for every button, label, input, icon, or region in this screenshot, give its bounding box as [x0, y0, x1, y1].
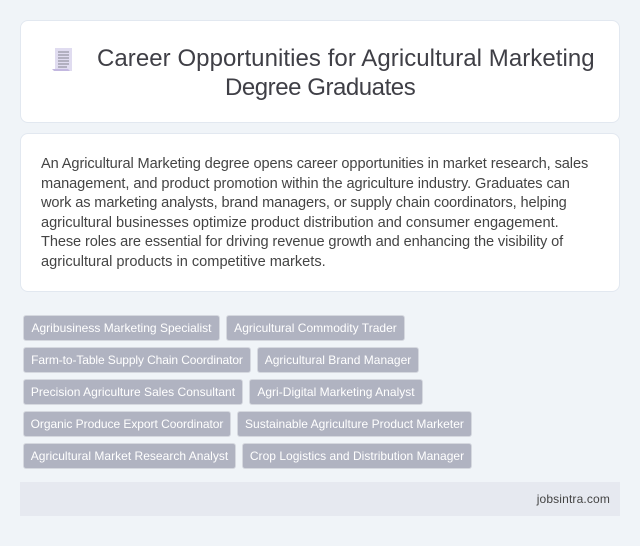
tag	[226, 315, 405, 341]
tag: Farm-to-Table Supply Chain Coordinator	[31, 353, 243, 367]
description text: agricultural businesses optimize product distribution and consumer engagement.	[41, 214, 559, 230]
tag: Agribusiness Marketing Specialist	[31, 321, 212, 335]
icon: document scroll	[52, 48, 72, 71]
description text	[41, 156, 588, 270]
tag: Sustainable Agriculture Product Marketer	[245, 417, 464, 431]
title line 2: Degree Graduates	[225, 74, 415, 101]
panel: description	[20, 133, 620, 292]
tag: Agri-Digital Marketing Analyst	[257, 385, 415, 399]
footer source text: jobsintra.com	[537, 492, 610, 506]
tag: Crop Logistics and Distribution Manager	[250, 449, 464, 463]
description text: These roles are essential for driving revenue growth and enhancing the visibility of	[41, 234, 563, 250]
title line 1: Career Opportunities for Agricultural Marketing	[97, 45, 595, 72]
tag: Agricultural Market Research Analyst	[31, 449, 228, 463]
tag	[23, 315, 220, 341]
tag: Organic Produce Export Coordinator	[31, 417, 223, 431]
tag: Precision Agriculture Sales Consultant	[31, 385, 235, 399]
tag	[237, 411, 472, 437]
tag: Agricultural Commodity Trader	[234, 321, 397, 335]
description text: An Agricultural Marketing degree opens career opportunities in market research, sales	[41, 156, 588, 172]
tag	[242, 443, 472, 469]
tag	[257, 347, 419, 373]
tag: Agricultural Brand Manager	[265, 353, 411, 367]
tag	[23, 411, 231, 437]
tag	[249, 379, 423, 405]
tag	[23, 379, 243, 405]
tag	[23, 347, 251, 373]
panel: career tags	[23, 315, 472, 469]
description text: work as marketing analysts, brand managers, or supply chain coordinators, helping	[41, 195, 567, 211]
description text: management, and product promotion within the agriculture industry. Graduates can	[41, 176, 570, 192]
tag	[23, 443, 236, 469]
description text: agricultural products in competitive markets.	[41, 254, 326, 270]
panel: title card	[20, 20, 620, 123]
footer bar	[20, 482, 620, 516]
